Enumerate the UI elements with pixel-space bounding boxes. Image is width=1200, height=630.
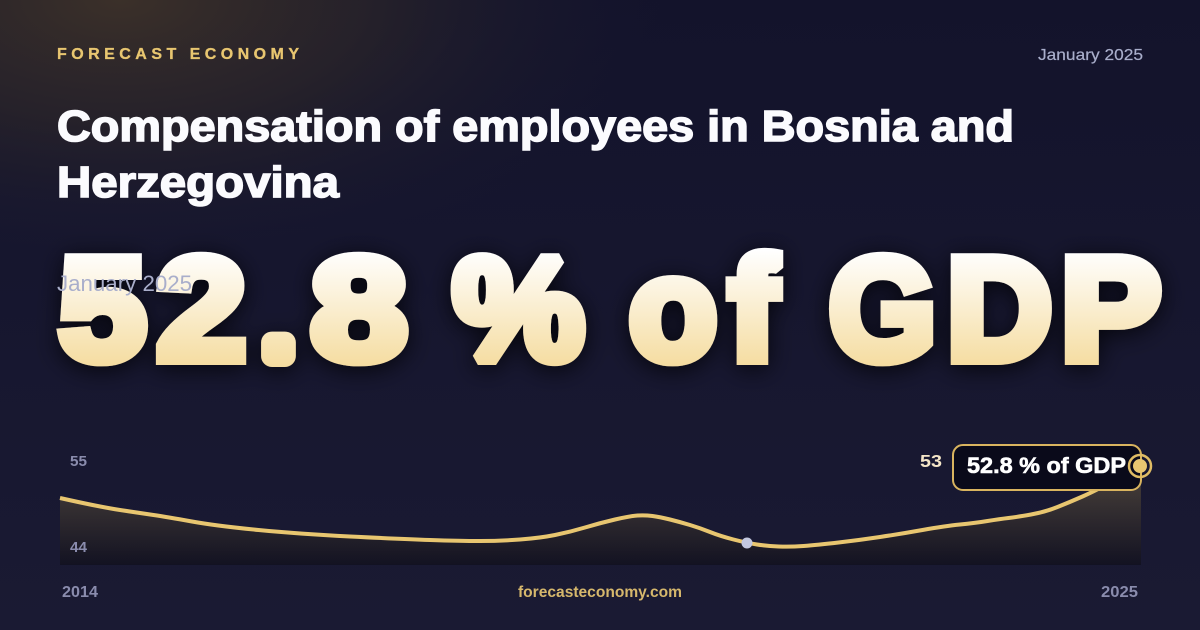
eyebrow: brand name: FORECAST ECONOMY: [57, 46, 299, 63]
callout: [953, 445, 1151, 490]
trend line: [60, 466, 1141, 547]
hero value: f: [729, 228, 778, 390]
axis max label: 55: [70, 454, 87, 470]
hero value: o: [629, 228, 717, 390]
area chart: [60, 466, 1141, 565]
axis min label: 44: [70, 540, 87, 556]
area fill: [60, 466, 1141, 565]
hero value: 8: [311, 228, 407, 390]
title: Herzegovina: [57, 158, 340, 207]
hero value: D: [947, 228, 1052, 390]
date: top right: January 2025: [1038, 47, 1143, 64]
hero value: 2: [157, 228, 246, 390]
hero value: %: [453, 228, 584, 390]
current marker: [1129, 455, 1151, 477]
source website: forecasteconomy.com: [518, 584, 682, 601]
hero value: G: [829, 228, 936, 390]
current axis label: 53: [920, 451, 942, 471]
callout box: [953, 445, 1141, 490]
hero value: .: [266, 276, 291, 376]
hero value: P: [1061, 228, 1161, 390]
x-axis end year: 2025: [1101, 584, 1138, 601]
title: Compensation of employees in Bosnia and: [57, 102, 1014, 151]
callout value: 52.8 % of GDP: [967, 453, 1126, 478]
overlapping date label: January 2025: [57, 271, 192, 296]
mid data point: [742, 538, 752, 548]
hero value: 5: [59, 228, 146, 390]
x-axis start year: 2014: [62, 584, 98, 601]
